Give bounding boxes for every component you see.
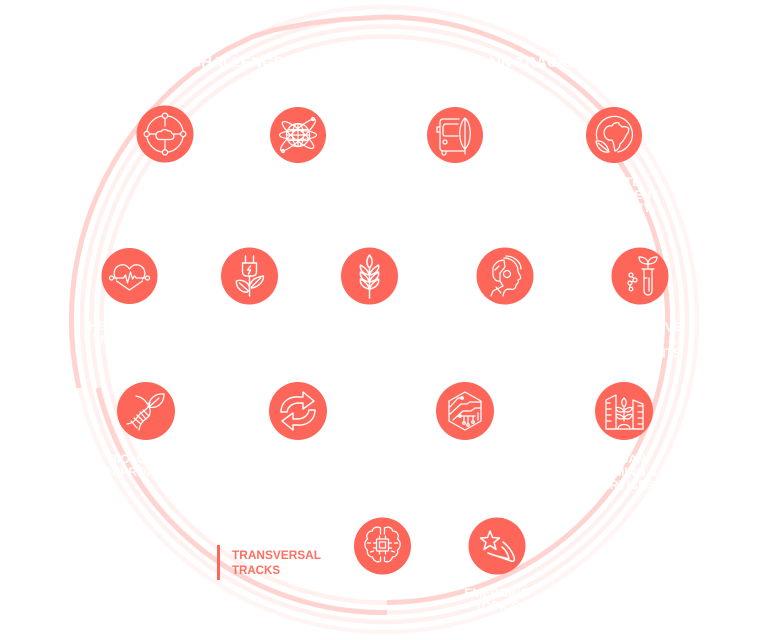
white section labels over the rings: MEDICINE: [100, 332, 159, 346]
white section labels over the rings: ENVIRONMENT: [570, 188, 659, 202]
white section labels over the rings: URBAN: [602, 452, 646, 466]
icon: circuit hexagon: [436, 382, 494, 440]
icon: brain with chip: [354, 518, 411, 574]
white section labels over the rings: PROTEINS &: [603, 333, 677, 347]
icon: renewal arrows: [269, 382, 327, 440]
icon: heart with pulse: [102, 248, 158, 304]
legend bar: [217, 545, 220, 580]
legend: transversal tracks: [217, 545, 321, 580]
white section labels over the rings: HEALTHCARE: [89, 319, 170, 333]
icon: test tube with sprout: [612, 248, 668, 304]
icon: globe with orbits: [270, 107, 326, 163]
white section labels over the rings: SERVICES: [594, 478, 654, 492]
white section labels over the rings: CLIMATE: [588, 175, 640, 189]
icon: earth with leaf: [586, 107, 642, 163]
white section labels over the rings: FARMING &: [590, 465, 658, 479]
white section labels over the rings: TOPICS: [475, 599, 519, 613]
icon: cloud network: [136, 106, 194, 162]
white section labels over the rings: & ECONOMY: [577, 201, 651, 215]
icon: shooting star: [468, 518, 526, 574]
icon: vertical farm city: [595, 382, 653, 440]
icon: robot head profile: [476, 248, 534, 304]
white section labels over the rings: EMERGING: [464, 586, 530, 600]
icon: dna with leaf: [117, 382, 175, 440]
white section labels over the rings: SYSTEMS: [136, 188, 194, 202]
white section labels over the rings: ALTERNATIVE: [599, 320, 681, 334]
white section labels over the rings: APPROACHES: [104, 465, 188, 479]
icon: wheat: [341, 248, 398, 304]
pale background rings: [72, 7, 697, 632]
white section labels over the rings: INGREDIENTS: [599, 346, 681, 360]
white section labels over the rings: [89, 54, 681, 613]
legend: transversal tracks: TRACKS: [232, 563, 280, 577]
legend text: TRANSVERSAL: [232, 548, 321, 562]
white section labels over the rings: MAIN TRACKS: [474, 54, 578, 71]
icon: plug plant: [221, 248, 278, 304]
highlighted arc segments: [71, 17, 668, 613]
white section labels over the rings: BIOLOGICAL: [108, 452, 184, 466]
white section labels over the rings: CHALLENGE: [190, 54, 284, 71]
icon: green bus with leaf: [427, 107, 483, 163]
white section labels over the rings: DIGITAL: [141, 175, 189, 189]
